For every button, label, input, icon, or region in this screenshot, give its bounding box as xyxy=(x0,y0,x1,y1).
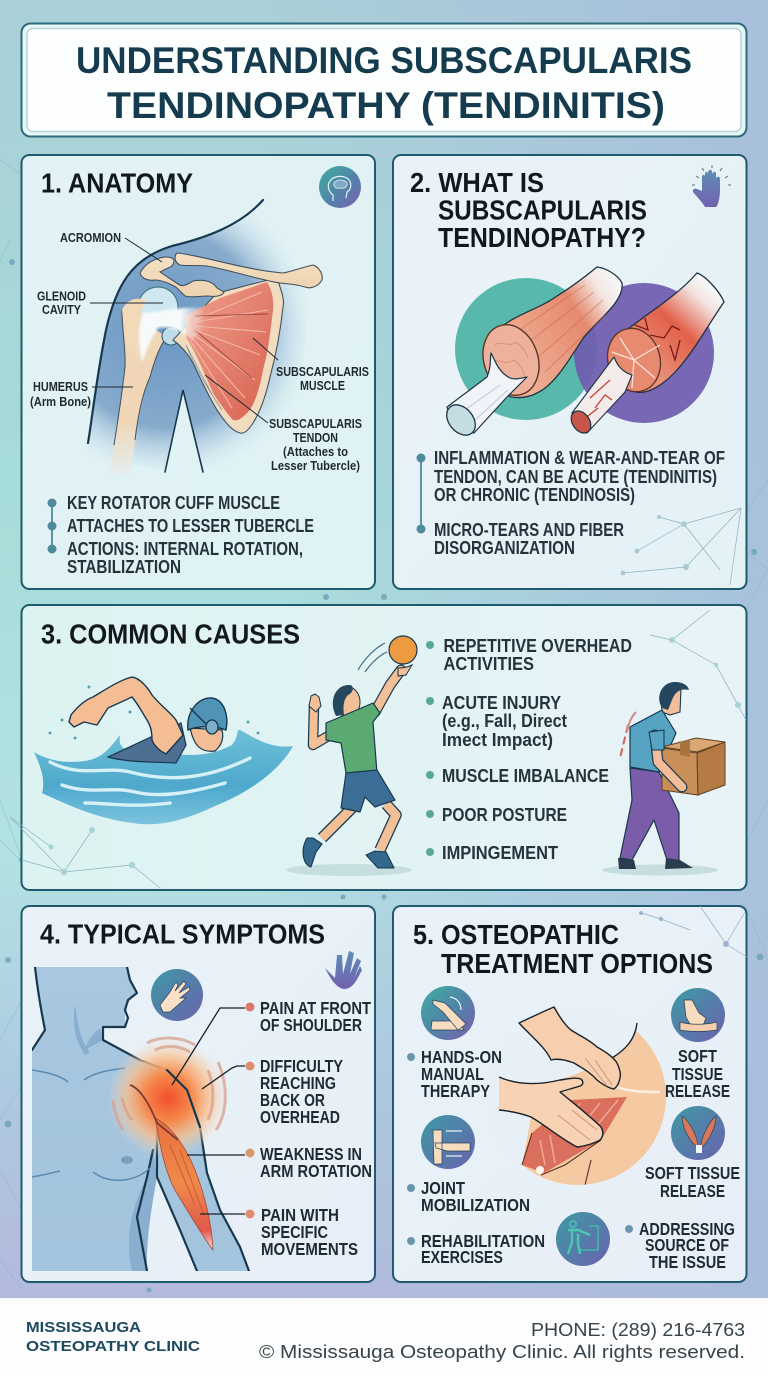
icon: muscles xyxy=(671,1106,725,1160)
symptoms list: OF SHOULDER xyxy=(260,1015,362,1035)
definition bullet list xyxy=(416,448,725,558)
symptoms list: PAIN WITH xyxy=(261,1205,339,1225)
heading: what is: 2. WHAT IS xyxy=(410,167,544,198)
clinic name xyxy=(26,1319,200,1355)
icon: joint mobilization xyxy=(421,1115,475,1169)
definition bullet list: TENDON, CAN BE ACUTE (TENDINITIS) xyxy=(434,467,717,487)
title banner xyxy=(22,24,746,136)
illustration: swimmer xyxy=(34,677,293,824)
treatment options list: EXERCISES xyxy=(421,1247,503,1267)
treatment options list: REHABILITATION xyxy=(421,1231,545,1251)
anatomy labels: SUBSCAPULARIS xyxy=(269,416,362,431)
heading: common causes: 3. COMMON CAUSES xyxy=(41,618,300,650)
heading: anatomy: 1. ANATOMY xyxy=(41,168,193,198)
treatment options list: MANUAL xyxy=(421,1064,484,1084)
heading: what is xyxy=(410,167,647,253)
symptoms list: WEAKNESS IN xyxy=(260,1144,362,1164)
heading: treatment options: TREATMENT OPTIONS xyxy=(441,948,713,979)
anatomy labels: CAVITY xyxy=(42,302,81,317)
treatment options list: THE ISSUE xyxy=(649,1252,726,1272)
icon: hand on shoulder xyxy=(151,969,203,1021)
shoulder anatomy diagram xyxy=(85,200,322,478)
anatomy labels: GLENOID xyxy=(37,288,86,304)
anatomy labels: MUSCLE xyxy=(300,378,345,393)
treatment options list: SOFT TISSUE xyxy=(645,1163,740,1183)
heading: treatment options xyxy=(413,919,713,979)
treatment options list: HANDS-ON xyxy=(421,1047,502,1067)
icon: manual therapy xyxy=(421,986,475,1040)
heading: treatment options: 5. OSTEOPATHIC xyxy=(413,919,619,950)
symptoms list: SPECIFIC xyxy=(261,1222,328,1242)
anatomy bullet list: ACTIONS: INTERNAL ROTATION, xyxy=(67,539,303,559)
body illustration with pain glow xyxy=(32,967,249,1271)
heading: what is: SUBSCAPULARIS xyxy=(438,194,647,226)
anatomy bullet list: STABILIZATION xyxy=(67,557,181,577)
treatment options list: RELEASE xyxy=(660,1181,725,1201)
symptoms list: OVERHEAD xyxy=(260,1107,340,1127)
causes bullet list: POOR POSTURE xyxy=(442,805,567,825)
anatomy labels xyxy=(30,230,369,473)
healthy tendon xyxy=(441,267,622,441)
leader lines xyxy=(90,238,278,423)
clinic name: MISSISSAUGA xyxy=(26,1319,141,1336)
treatment options list: TISSUE xyxy=(672,1064,723,1084)
causes bullet list xyxy=(426,636,632,863)
anatomy bullet list xyxy=(48,493,314,577)
panel: osteopathic treatment options xyxy=(393,906,747,1282)
treatment options list: ADDRESSING xyxy=(639,1219,735,1239)
heading: what is: TENDINOPATHY? xyxy=(438,222,646,253)
anatomy labels: ACROMION xyxy=(60,230,121,245)
definition bullet list: MICRO-TEARS AND FIBER xyxy=(434,520,624,540)
clinic name: OSTEOPATHY CLINIC xyxy=(26,1338,200,1355)
callout lines xyxy=(172,1008,245,1214)
symptoms list: DIFFICULTY xyxy=(260,1056,343,1076)
treatment options list: JOINT xyxy=(421,1178,465,1198)
treatment options list: SOURCE OF xyxy=(645,1235,729,1255)
illustration: person lifting box xyxy=(602,682,725,876)
damaged tendon xyxy=(567,273,724,437)
symptoms list: PAIN AT FRONT xyxy=(260,998,371,1018)
footer xyxy=(0,1298,768,1376)
illustration: overhead player xyxy=(286,636,417,876)
panel: anatomy xyxy=(22,155,375,589)
anatomy bullet list: KEY ROTATOR CUFF MUSCLE xyxy=(67,493,280,513)
contact and copyright: © Mississauga Osteopathy Clinic. All rights reserved. xyxy=(259,1342,745,1362)
central illustration: hands on shoulder xyxy=(490,1006,666,1185)
contact and copyright xyxy=(259,1320,745,1362)
contact and copyright: PHONE: (289) 216-4763 xyxy=(531,1320,745,1340)
causes bullet list: (e.g., Fall, Direct xyxy=(442,711,567,731)
symptoms list xyxy=(246,998,372,1259)
tendon illustrations on coloured circles xyxy=(441,267,724,441)
icon: hand with rays xyxy=(692,165,731,207)
causes bullet list: ACUTE INJURY xyxy=(442,693,561,713)
anatomy labels: Lesser Tubercle) xyxy=(271,458,360,473)
causes bullet list: MUSCLE IMBALANCE xyxy=(442,766,609,786)
anatomy labels: SUBSCAPULARIS xyxy=(276,364,369,379)
definition bullet list: DISORGANIZATION xyxy=(434,538,575,558)
symptoms list: MOVEMENTS xyxy=(261,1239,358,1259)
treatment options list: RELEASE xyxy=(665,1081,730,1101)
treatment options list: MOBILIZATION xyxy=(421,1195,530,1215)
icon: purple hand xyxy=(325,951,362,989)
anatomy bullet list: ATTACHES TO LESSER TUBERCLE xyxy=(67,516,314,536)
treatment options list: SOFT xyxy=(678,1046,717,1066)
title banner: TENDINOPATHY (TENDINITIS) xyxy=(107,85,665,126)
causes bullet list: ACTIVITIES xyxy=(444,654,534,674)
anatomy labels: TENDON xyxy=(293,430,338,445)
causes bullet list: Imect Impact) xyxy=(442,730,553,750)
symptoms list: BACK OR xyxy=(260,1090,325,1110)
symptoms list: REACHING xyxy=(260,1073,336,1093)
causes bullet list: REPETITIVE OVERHEAD xyxy=(444,636,632,656)
icon: soft tissue release xyxy=(671,988,725,1042)
anatomy labels: (Arm Bone) xyxy=(30,394,91,409)
panel: common causes xyxy=(10,605,746,890)
causes bullet list: IMPINGEMENT xyxy=(442,843,558,863)
anatomy labels: (Attaches to xyxy=(283,444,348,459)
heading: typical symptoms: 4. TYPICAL SYMPTOMS xyxy=(40,918,325,950)
treatment options list xyxy=(407,1046,740,1272)
anatomy labels: HUMERUS xyxy=(33,379,88,394)
panel: what is subscapularis tendinopathy xyxy=(393,155,746,589)
title banner: UNDERSTANDING SUBSCAPULARIS xyxy=(76,40,692,81)
icon: brain in head xyxy=(319,166,361,208)
panel: typical symptoms xyxy=(22,906,375,1282)
icon: rehabilitation exercise xyxy=(556,1212,610,1266)
treatment options list: THERAPY xyxy=(421,1081,490,1101)
symptoms list: ARM ROTATION xyxy=(260,1161,372,1181)
definition bullet list: OR CHRONIC (TENDINOSIS) xyxy=(434,485,635,505)
